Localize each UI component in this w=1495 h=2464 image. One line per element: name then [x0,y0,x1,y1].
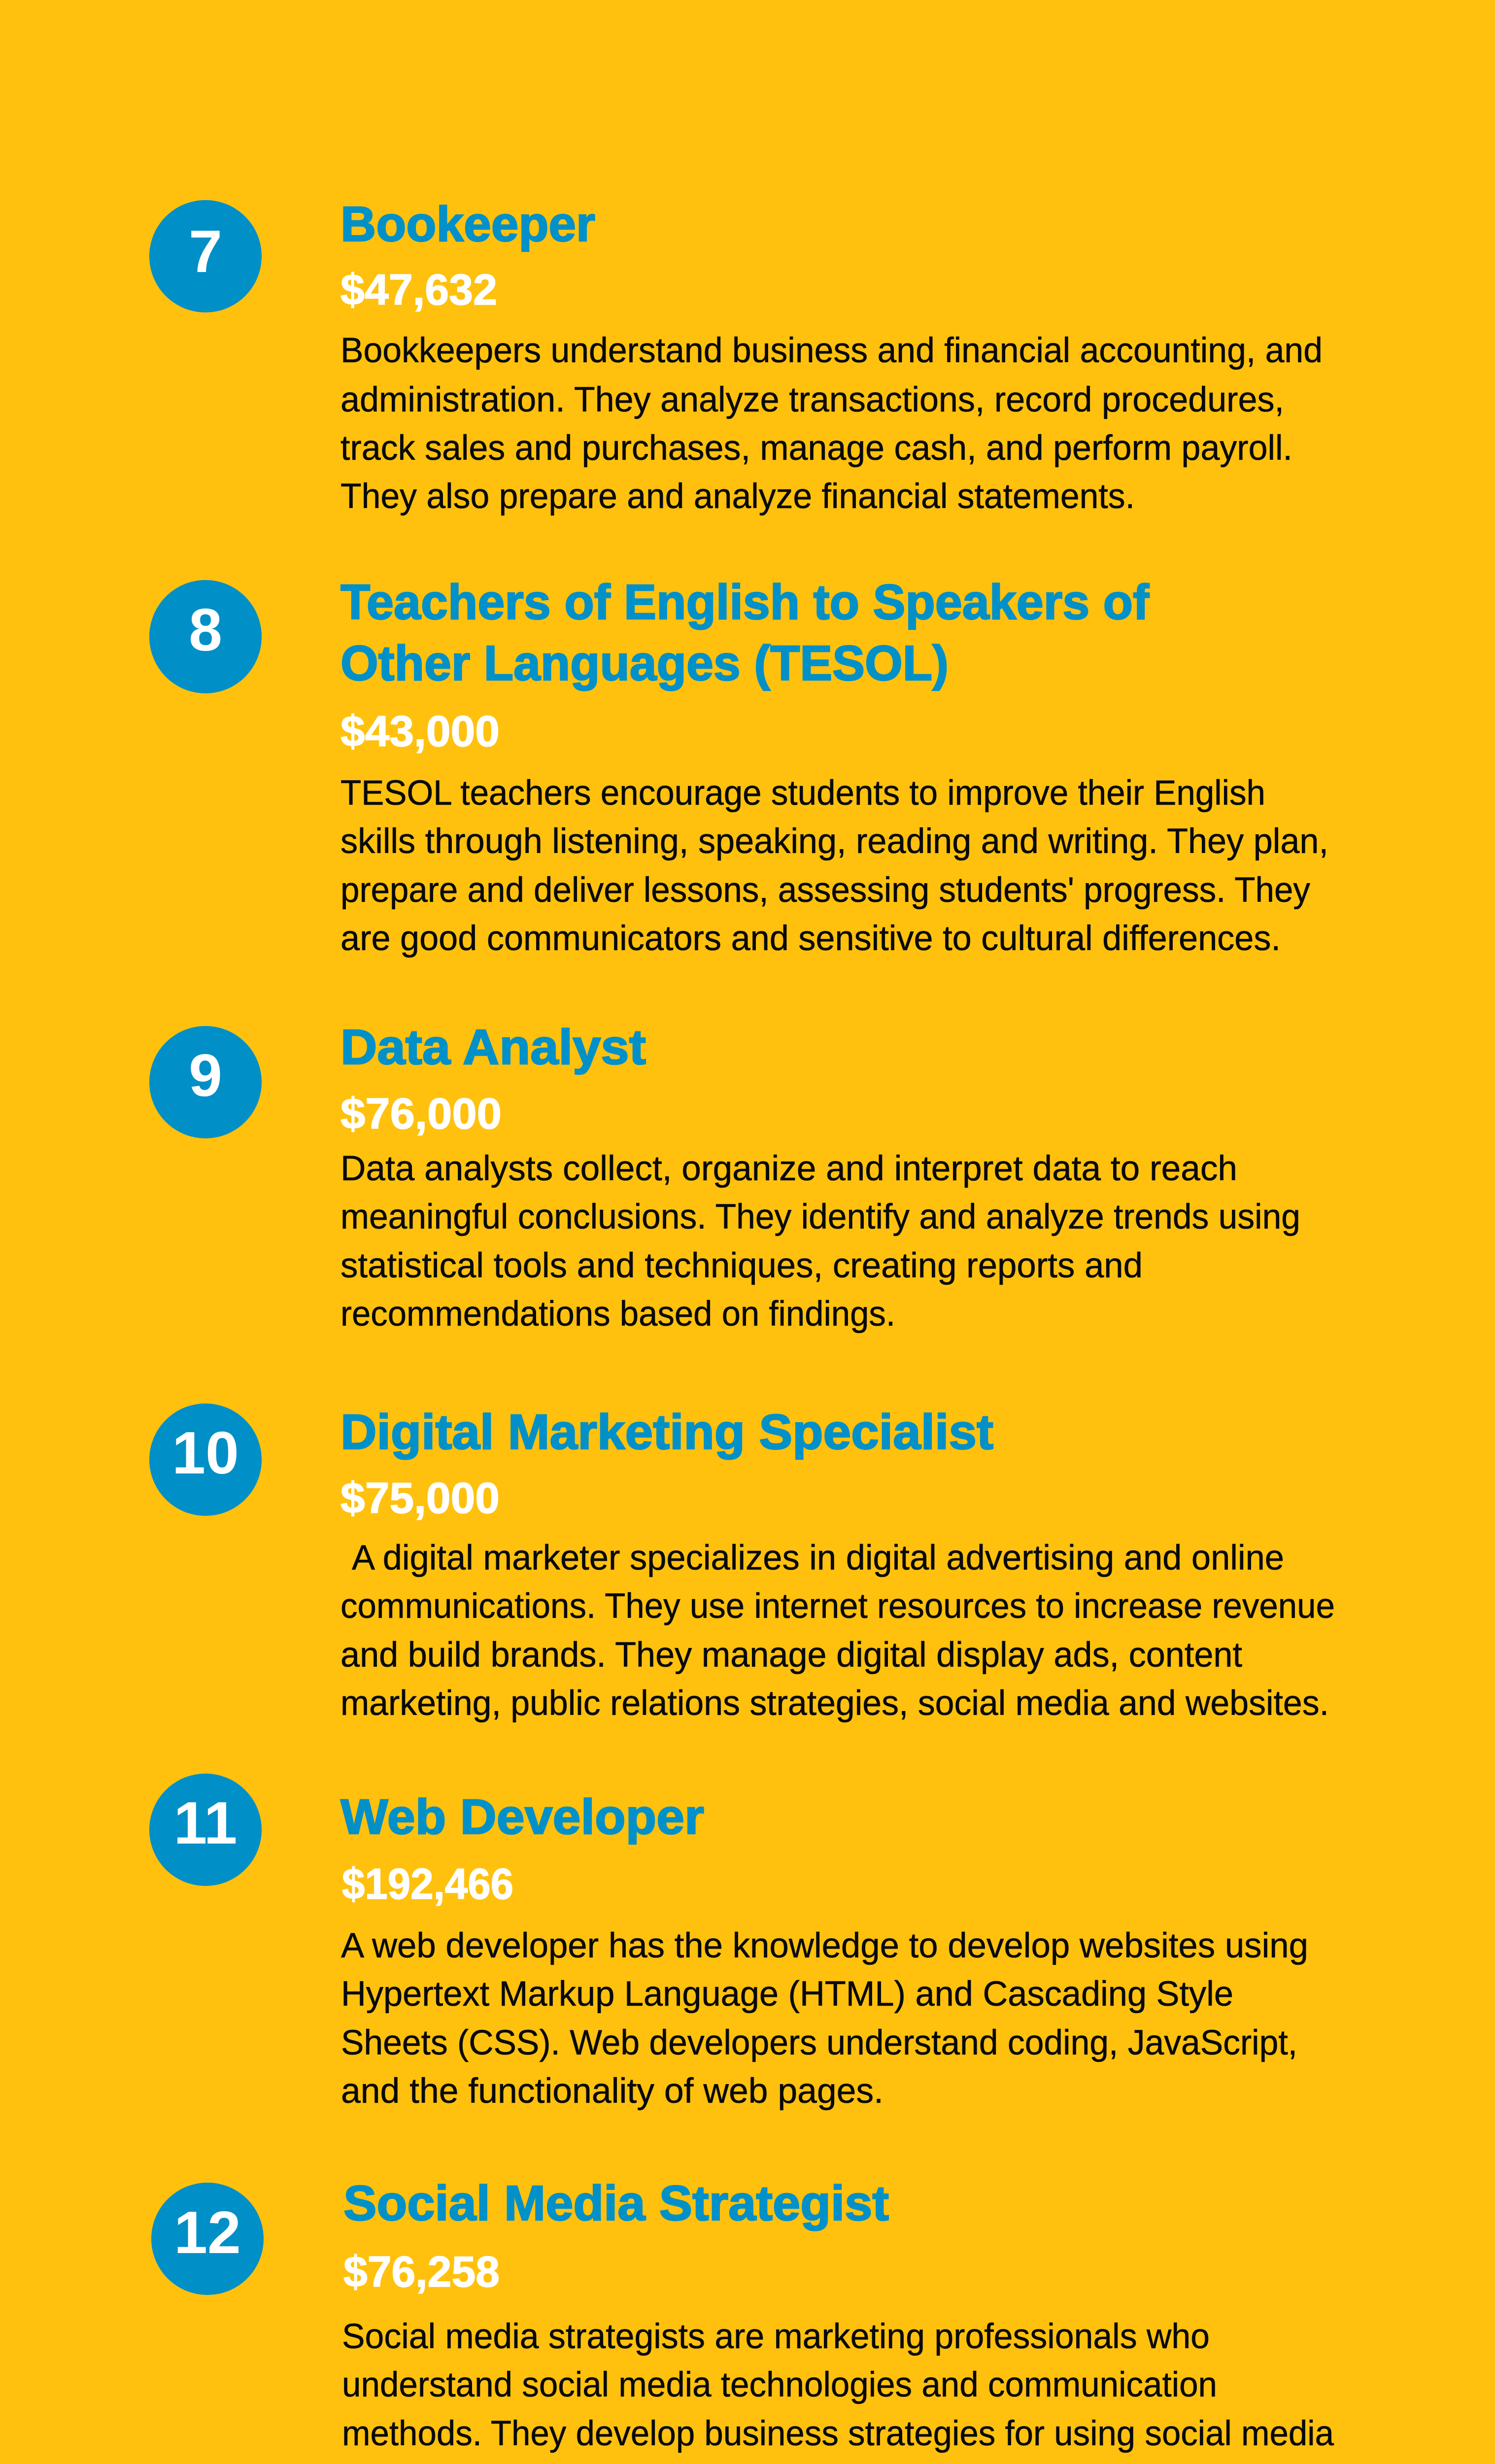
description: A digital marketer specializes in digital advertising and online [352,1539,1284,1577]
badge: number 8: 8 [189,596,222,663]
description: meaningful conclusions. They identify and analyze trends using [340,1198,1300,1236]
description [340,331,1323,516]
badge: number 9: 9 [189,1042,222,1109]
salary: $192,466 [342,1859,513,1908]
description [340,1539,1335,1723]
salary: $47,632 [340,265,497,314]
description: Sheets (CSS). Web developers understand coding, JavaScript, [341,2023,1297,2062]
badge: number 10: 10 [172,1419,239,1486]
badge: number 9 [149,1026,262,1138]
heading: Data Analyst: Data Analyst [340,1020,646,1075]
description: and build brands. They manage digital display ads, content [340,1636,1242,1675]
heading: Digital Marketing Specialist: Digital Marketing Specialist [340,1404,993,1460]
description: prepare and deliver lessons, assessing students' progress. They [340,871,1310,910]
badge: number 11: 11 [174,1789,237,1856]
description: statistical tools and techniques, creating reports and [340,1246,1143,1285]
badge: number 10 [149,1403,262,1516]
description: skills through listening, speaking, reading and writing. They plan, [340,822,1328,861]
description: They also prepare and analyze financial statements. [340,477,1135,516]
description: marketing, public relations strategies, social media and websites. [340,1684,1329,1723]
badge: number 11 [149,1774,262,1886]
heading: Teachers of English: Teachers of English to Speakers of [340,575,1150,630]
heading: Teachers of English: Other Languages (TESOL) [340,636,949,691]
description [340,774,1328,958]
heading: Social Media Strategist: Social Media Strategist [343,2176,889,2231]
salary: $43,000 [340,707,500,755]
badge: number 7: 7 [189,218,222,285]
description: communications. They use internet resources to increase revenue [340,1587,1335,1626]
salary: $76,258 [343,2247,500,2296]
panel: job 12 social media strategist [151,2176,1334,2464]
panel: job 8 TESOL [149,575,1328,958]
description: TESOL teachers encourage students to improve their English [340,774,1265,813]
description [341,1926,1308,2111]
panel: job 7 bookkeeper [149,197,1323,516]
badge: number 12: 12 [174,2199,241,2266]
description: recommendations based on findings. [340,1295,895,1334]
badge: number 8 [149,580,262,693]
description [340,1149,1300,1334]
badge: number 12 [151,2183,264,2295]
panel: job 10 digital marketing [149,1403,1335,1723]
heading: Bookeeper: Bookeeper [340,197,595,252]
salary: $75,000 [340,1473,500,1522]
heading: Web Developer: Web Developer [340,1789,704,1845]
badge: number 7 [149,200,262,312]
description: Bookkeepers understand business and financial accounting, and [340,331,1323,370]
description: understand social media technologies and communication [342,2365,1217,2404]
description: Social media strategists are marketing professionals who [342,2317,1210,2356]
panel: job 11 web developer [149,1774,1308,2111]
description: administration. They analyze transactions, record procedures, [340,380,1284,419]
heading: Teachers of English [340,575,1150,691]
description: track sales and purchases, manage cash, and perform payroll. [340,429,1292,468]
description: and the functionality of web pages. [341,2072,883,2111]
description [342,2317,1334,2464]
panel: job 9 data analyst [149,1020,1300,1334]
salary: $76,000 [340,1089,502,1138]
description: Data analysts collect, organize and interpret data to reach [340,1149,1237,1188]
description: methods. They develop business strategies for using social media [342,2414,1334,2453]
description: Hypertext Markup Language (HTML) and Cascading Style [341,1975,1233,2014]
description: are good communicators and sensitive to cultural differences. [340,919,1281,958]
description: A web developer has the knowledge to develop websites using [341,1926,1308,1965]
